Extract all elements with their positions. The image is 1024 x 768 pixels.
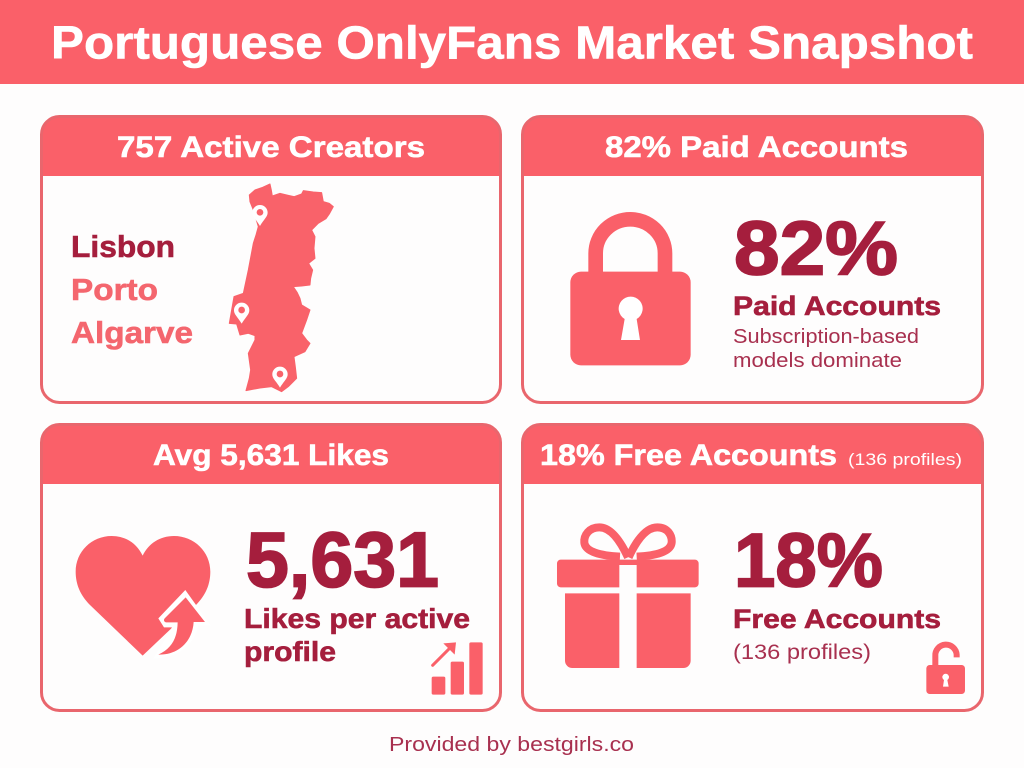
description: subscription models — [733, 326, 919, 372]
description: subscription models: Subscription-based — [733, 326, 919, 348]
icon: gift box — [557, 527, 699, 668]
panel: average likes — [42, 424, 501, 710]
panel: paid accounts — [522, 116, 983, 402]
stat label: likes per active profile — [244, 603, 470, 667]
panel: active creators — [42, 116, 501, 402]
panel heading: free accounts: 18% Free Accounts — [540, 439, 837, 472]
stat label: likes per active profile: Likes per active — [244, 603, 470, 634]
description: 136 profiles: (136 profiles) — [733, 641, 871, 664]
stat: 5,631: 5,631 — [246, 516, 439, 604]
panel heading: free accounts — [540, 439, 962, 472]
icon: rising bar chart — [432, 642, 483, 695]
map of Portugal with pins — [229, 184, 333, 392]
panel heading: free accounts: (136 profiles) — [848, 450, 962, 469]
title banner — [0, 0, 1024, 84]
stat label: paid accounts: Paid Accounts — [733, 291, 941, 321]
city list — [71, 229, 193, 350]
icon: open padlock — [926, 645, 965, 694]
panel heading: active creators: 757 Active Creators — [117, 131, 425, 164]
stat label: free accounts: Free Accounts — [733, 604, 941, 634]
city list: Porto — [71, 272, 158, 307]
panel heading: average likes: Avg 5,631 Likes — [153, 439, 389, 472]
footer credit: Provided by bestgirls.co — [389, 734, 634, 756]
stat label: likes per active profile: profile — [244, 636, 336, 667]
icon: closed padlock — [570, 219, 691, 365]
city list: Algarve — [71, 315, 193, 350]
stat: 82 percent: 82% — [734, 206, 898, 292]
stat: 18 percent: 18% — [734, 518, 883, 604]
description: subscription models: models dominate — [733, 350, 902, 372]
panel heading: paid accounts: 82% Paid Accounts — [605, 131, 908, 164]
icon: heart with up arrow — [76, 536, 211, 658]
panel: free accounts — [522, 424, 983, 710]
title banner: Portuguese OnlyFans Market Snapshot — [51, 16, 973, 68]
city list: Lisbon — [71, 229, 175, 264]
